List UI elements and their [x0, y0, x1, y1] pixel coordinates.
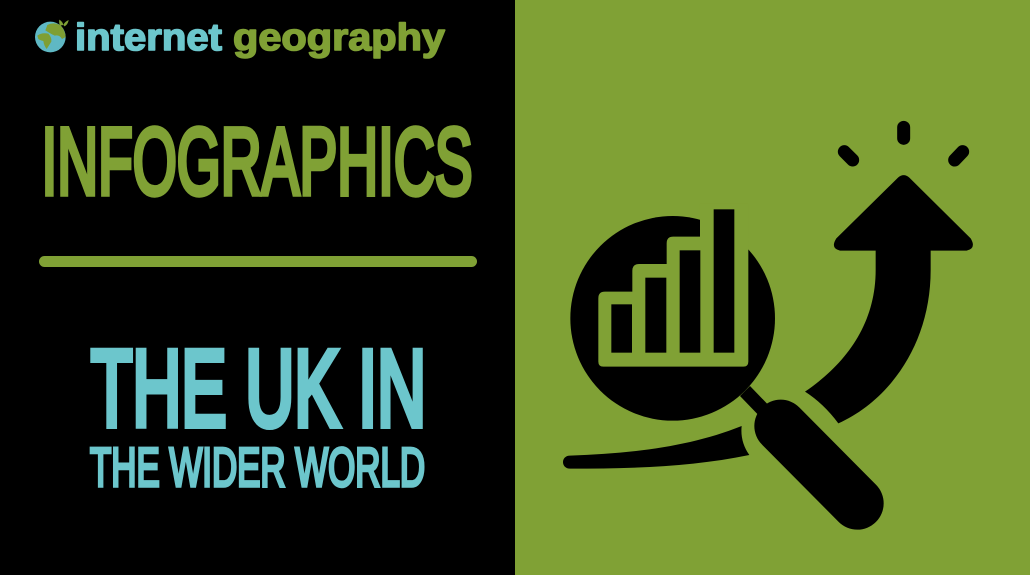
magnifier neck	[740, 386, 768, 415]
panel: right green background	[515, 0, 1030, 575]
icon: globe with leaf	[35, 20, 69, 52]
icon: swoosh tail	[563, 426, 749, 469]
heading: THE UK IN: THE UK IN	[91, 328, 426, 448]
chart outline cut-out	[598, 203, 748, 367]
divider line	[39, 256, 477, 267]
logo: internet geography	[35, 17, 445, 59]
subheading: THE WIDER WORLD: THE WIDER WORLD	[90, 437, 425, 498]
logo word: geography: geography	[233, 17, 445, 59]
chart bars	[611, 209, 734, 353]
magnifier lens	[570, 216, 775, 421]
icon: magnifier over bar chart with rising arrow	[563, 127, 973, 503]
heading: INFOGRAPHICS: INFOGRAPHICS	[42, 109, 472, 215]
logo word: internet: internet	[75, 17, 222, 59]
icon: spark lines	[844, 127, 963, 160]
icon: magnifier	[570, 203, 857, 503]
magnifier handle	[781, 426, 857, 503]
icon: curved arrow	[805, 175, 973, 423]
